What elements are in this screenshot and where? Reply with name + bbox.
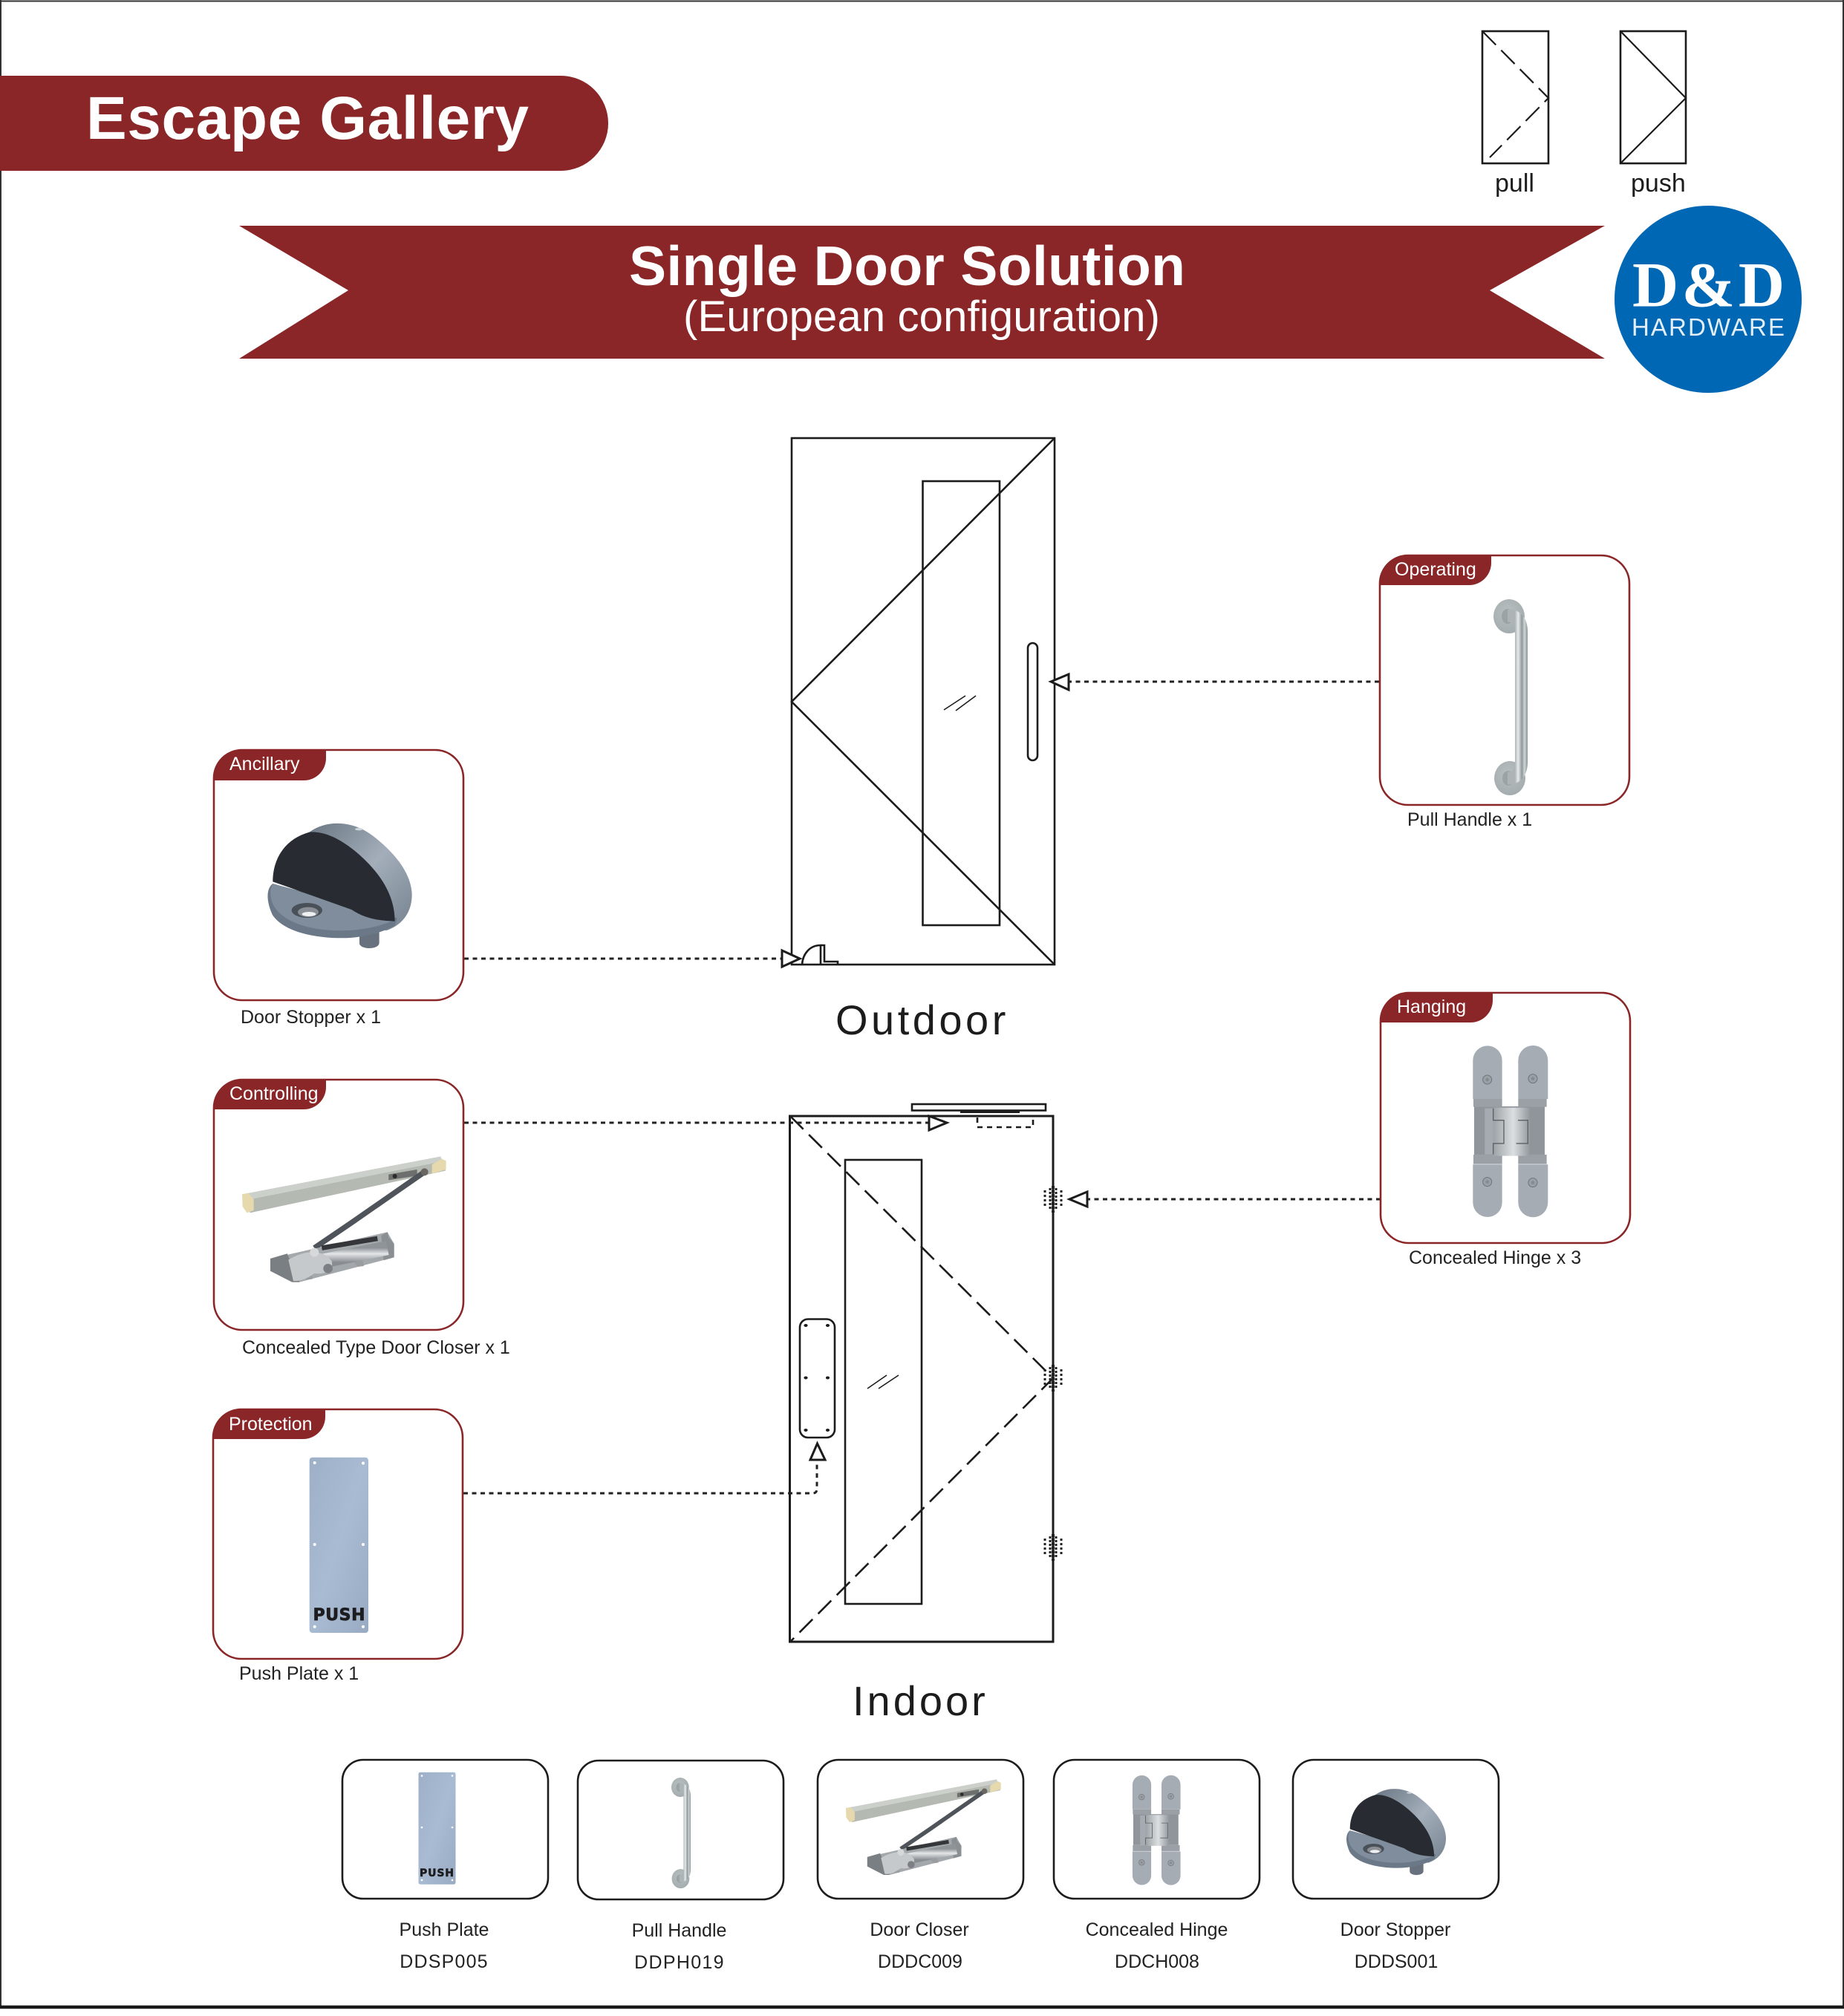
product card: Push Plate: PUSH <box>420 1867 454 1879</box>
icon: push plate schematic <box>800 1319 835 1438</box>
arrow: pull handle pointer <box>1051 674 1379 690</box>
legend: push door symbol: push <box>1631 169 1686 198</box>
legend: push door symbol <box>1620 31 1686 198</box>
panel: Controlling: Controlling <box>229 1083 319 1104</box>
product card: Door Stopper: DDDS001 <box>1355 1951 1438 1972</box>
indoor door elevation <box>790 1116 1053 1642</box>
product card: Door Closer: Door Closer <box>870 1919 969 1940</box>
ribbon title: Single Door Solution <box>239 226 1605 359</box>
legend: pull door symbol <box>1482 31 1548 198</box>
icon: concealed hinge mark top <box>1045 1186 1061 1213</box>
caption: Concealed Type Door Closer x 1: Concealed Type Door Closer x 1 <box>242 1337 510 1358</box>
ribbon title: Single Door Solution: Single Door Solution <box>629 235 1185 297</box>
arrow: door closer pointer <box>464 1116 947 1130</box>
logo: D&D Hardware <box>1615 206 1802 393</box>
icon: concealed hinge mark middle <box>1045 1365 1061 1392</box>
heading banner: Escape Gallery <box>0 76 608 171</box>
photo: pull handle <box>1493 599 1525 795</box>
photo: push plate: PUSH <box>313 1606 365 1625</box>
ribbon title: Single Door Solution: (European configuration) <box>683 293 1160 341</box>
photo: door closer <box>242 1156 446 1282</box>
photo: door stopper <box>267 823 412 948</box>
caption: Door Stopper x 1: Door Stopper x 1 <box>241 1007 381 1028</box>
arrow: concealed hinge pointer <box>1069 1192 1381 1207</box>
product card: Push Plate: DDSP005 <box>400 1951 489 1972</box>
product card: Push Plate <box>342 1760 548 1972</box>
arrow: door stopper pointer <box>464 950 800 967</box>
outdoor door elevation <box>792 438 1055 965</box>
panel: Protection: Protection <box>229 1414 313 1435</box>
panel: Protection <box>213 1409 463 1659</box>
caption: Pull Handle x 1: Pull Handle x 1 <box>1407 809 1532 830</box>
product card: Push Plate: Push Plate <box>400 1919 489 1940</box>
icon: door closer on indoor door <box>912 1104 1046 1127</box>
product card: Pull Handle <box>578 1761 783 1973</box>
panel: Ancillary <box>214 750 463 1000</box>
product card: Pull Handle: Pull Handle <box>632 1920 726 1941</box>
label: Outdoor: Outdoor <box>835 996 1009 1043</box>
product card: Door Closer: DDDC009 <box>878 1951 962 1972</box>
product card: Concealed Hinge: Concealed Hinge <box>1086 1919 1228 1940</box>
label: Indoor: Indoor <box>853 1677 988 1724</box>
product card: Concealed Hinge: DDCH008 <box>1115 1951 1199 1972</box>
icon: concealed hinge mark bottom <box>1045 1534 1061 1561</box>
caption: Push Plate x 1: Push Plate x 1 <box>239 1663 359 1684</box>
product card: Concealed Hinge <box>1054 1760 1260 1972</box>
logo: D&D Hardware: D&D <box>1632 249 1785 321</box>
panel: Hanging <box>1381 993 1630 1243</box>
photo: push plate <box>310 1458 368 1633</box>
logo: D&D Hardware: HARDWARE <box>1632 313 1785 341</box>
heading banner: Escape Gallery: Escape Gallery <box>86 85 529 152</box>
arrow: push plate pointer <box>463 1444 825 1493</box>
product card: Pull Handle: DDPH019 <box>634 1952 725 1973</box>
product card: Door Stopper: Door Stopper <box>1340 1919 1450 1940</box>
legend: pull door symbol: pull <box>1495 169 1534 198</box>
panel: Controlling <box>214 1080 463 1330</box>
icon: door stopper on outdoor door <box>802 945 838 965</box>
panel: Hanging: Hanging <box>1397 996 1466 1017</box>
panel: Operating: Operating <box>1395 559 1476 580</box>
product card: Door Closer <box>818 1760 1023 1972</box>
caption: Concealed Hinge x 3: Concealed Hinge x 3 <box>1409 1247 1581 1268</box>
photo: concealed hinge <box>1473 1045 1548 1217</box>
panel: Ancillary: Ancillary <box>229 754 300 774</box>
product card: Door Stopper <box>1293 1760 1499 1972</box>
panel: Operating <box>1380 555 1629 805</box>
